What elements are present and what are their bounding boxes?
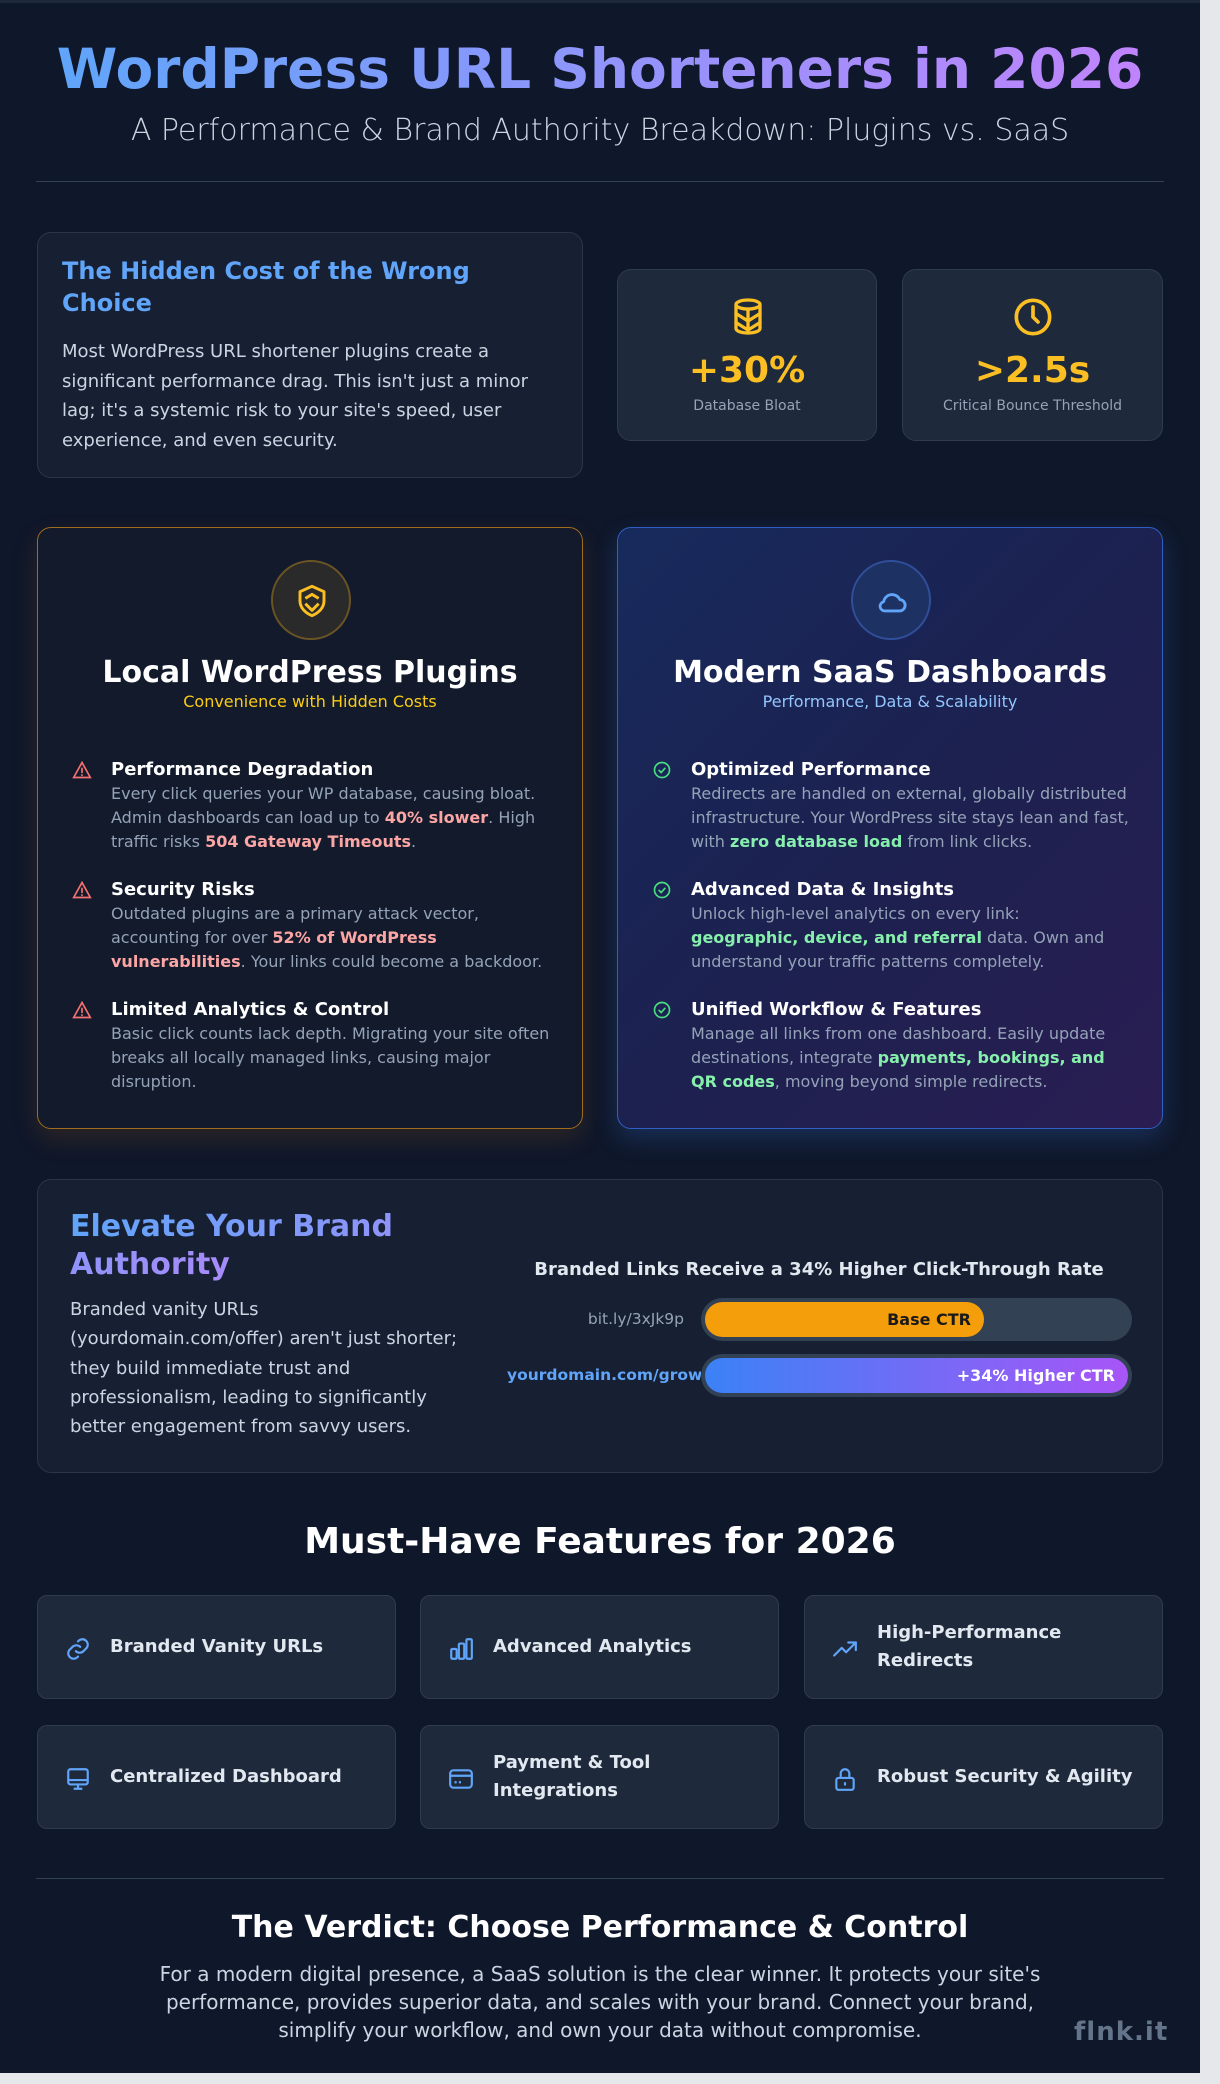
item: unified workflow — [654, 999, 1105, 1091]
stat: database bloat: +30% — [689, 350, 805, 391]
item: security risks — [72, 879, 542, 971]
subtitle: saas: Performance, Data & Scalability — [763, 692, 1017, 711]
feature: robust security — [804, 1725, 1163, 1829]
stat: bounce threshold — [902, 269, 1163, 441]
stat: bounce threshold: Critical Bounce Threshold — [943, 398, 1122, 414]
panel: saas dashboards: Unified Workflow & Features — [691, 999, 981, 1020]
panel: saas dashboards: Unlock high-level analytics on every link: — [691, 904, 1020, 923]
panel: local plugins — [37, 527, 583, 1129]
feature: high-performance redirects: High-Performance Redirects — [877, 1622, 1061, 1671]
heading: saas: Modern SaaS Dashboards — [673, 655, 1107, 690]
item: optimized performance — [654, 759, 1129, 851]
feature: high-performance redirects — [804, 1595, 1163, 1699]
stat: database bloat — [617, 269, 877, 441]
item: limited analytics — [72, 999, 549, 1091]
chart title: Branded Links Receive a 34% Higher Click-Through Rate — [534, 1259, 1104, 1280]
feature: robust security: Robust Security & Agility — [877, 1766, 1132, 1787]
heading: must-have features: Must-Have Features for 2026 — [304, 1521, 896, 1562]
icon: cloud — [851, 560, 931, 640]
stat: bounce threshold: >2.5s — [975, 350, 1090, 391]
panel: brand authority — [37, 1179, 1163, 1473]
panel: local plugins: Limited Analytics & Control — [111, 999, 389, 1020]
heading: verdict: The Verdict: Choose Performance & Control — [232, 1910, 968, 1945]
feature: payment integrations — [420, 1725, 779, 1829]
icon: shield — [271, 560, 351, 640]
panel: saas dashboards: geographic, device, and referral data. Own and understand your traffic patterns completely. — [691, 928, 1104, 971]
feature: branded vanity urls: Branded Vanity URLs — [110, 1636, 323, 1657]
panel: local plugins: Every click queries your WP database, causing bloat. Admin dashboards can load up to 40% slower. High traffic risks 504 Gateway Timeouts. — [111, 784, 535, 851]
panel: local plugins: Security Risks — [111, 879, 255, 900]
icon: database — [734, 298, 762, 335]
panel: saas dashboards: Optimized Performance — [691, 759, 931, 780]
heading: hidden cost: The Hidden Cost of the Wrong Choice — [62, 257, 470, 317]
heading: local plugins: Local WordPress Plugins — [102, 655, 518, 690]
chart: CTR bars — [507, 1259, 1132, 1397]
panel: saas dashboards: Manage all links from one dashboard. Easily update destinations, integrate payments, bookings, and QR codes, moving beyond simple redirects. — [691, 1024, 1105, 1091]
chart: CTR bars: +34% Higher CTR — [957, 1366, 1115, 1385]
chart: CTR bars: Base CTR — [887, 1310, 971, 1329]
panel: hidden cost — [37, 232, 583, 478]
panel: local plugins: Performance Degradation — [111, 759, 373, 780]
feature: branded vanity urls — [37, 1595, 396, 1699]
title: WordPress URL Shorteners in 2026 — [57, 37, 1143, 101]
subtitle: local plugins: Convenience with Hidden Costs — [183, 692, 437, 711]
stat: database bloat: Database Bloat — [693, 398, 801, 414]
text: brand authority: Branded vanity URLs (yourdomain.com/offer) aren't just shorter; they build immediate trust and professionalism, leading to significantly better engagement from savvy users. — [70, 1299, 457, 1437]
logo: flnk.it: flnk.it — [1074, 2017, 1168, 2047]
feature: centralized dashboard — [37, 1725, 396, 1829]
panel: local plugins: Basic click counts lack depth. Migrating your site often breaks all locally managed links, causing major disruption. — [111, 1024, 549, 1091]
item: performance degradation — [72, 759, 535, 851]
feature: centralized dashboard: Centralized Dashboard — [110, 1766, 342, 1787]
feature: payment integrations: Payment & Tool Integrations — [493, 1752, 650, 1801]
subtitle: A Performance & Brand Authority Breakdown: Plugins vs. SaaS — [131, 113, 1069, 148]
bar: bit.ly: bit.ly/3xJk9p — [588, 1310, 684, 1328]
panel: saas dashboards: Redirects are handled on external, globally distributed infrastructure. Your WordPress site stays lean and fast, with zero database load from link clicks. — [691, 784, 1129, 851]
feature: advanced analytics: Advanced Analytics — [493, 1636, 692, 1657]
feature: advanced analytics — [420, 1595, 779, 1699]
text: hidden cost: Most WordPress URL shortener plugins create a significant performance drag. This isn't just a minor lag; it's a systemic risk to your site's speed, user experience, and even security. — [62, 341, 528, 450]
panel: saas dashboards — [617, 527, 1163, 1129]
heading: brand authority: Elevate Your Brand Authority — [70, 1209, 393, 1282]
text: verdict: For a modern digital presence, a SaaS solution is the clear winner. It protects your site's performance, provides superior data, and scales with your brand. Connect your brand, simplify your workflow, and own your data without compromise. — [160, 1962, 1040, 2042]
panel: local plugins: Outdated plugins are a primary attack vector, accounting for over 52% of WordPress vulnerabilities. Your links could become a backdoor. — [111, 904, 542, 971]
panel: saas dashboards: Advanced Data & Insights — [691, 879, 954, 900]
item: advanced data — [654, 879, 1104, 971]
icon: clock — [1014, 298, 1052, 336]
